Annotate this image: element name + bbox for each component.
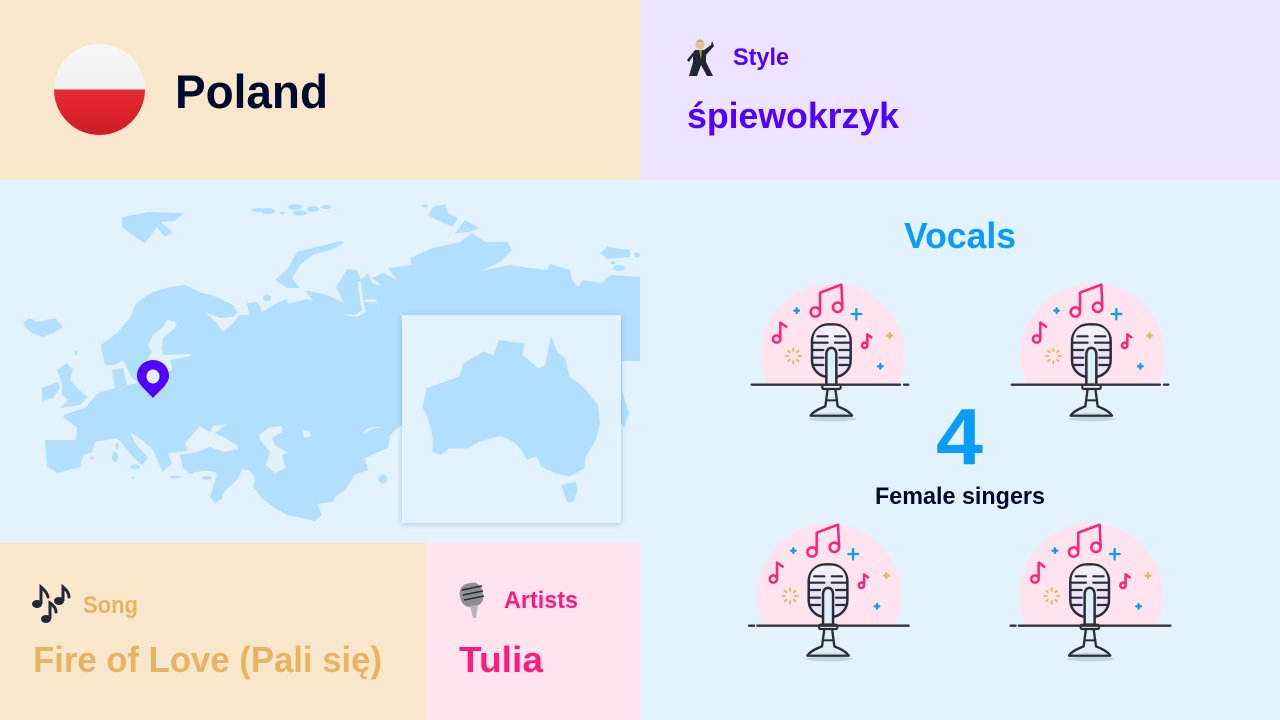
label: Female singers: Female singers: [875, 483, 1045, 510]
icon: microphone 1: [752, 283, 908, 427]
map: Eurasia: [23, 204, 640, 521]
panel: map: [0, 180, 640, 543]
number of singers: 4: [936, 392, 984, 481]
icon: microphone 3: [749, 523, 909, 667]
label: Style: Style: [733, 44, 789, 71]
panel: song: [0, 543, 427, 720]
icon: musical notes: [32, 587, 69, 623]
panel: country: [0, 0, 640, 180]
icon: microphone emoji: [458, 581, 485, 618]
panel: artists: [427, 543, 640, 720]
value: artist name: Tulia: [459, 639, 544, 680]
value: style name: śpiewokrzyk: [687, 95, 900, 136]
inset: Australia: [402, 315, 621, 523]
value: song title: Fire of Love (Pali się): [33, 639, 382, 680]
icon: microphone 2: [1012, 283, 1168, 427]
icon: microphone 4: [1011, 523, 1170, 667]
heading: Poland: Poland: [175, 65, 328, 118]
icon: map pin: [137, 360, 169, 398]
label: Artists: Artists: [504, 587, 578, 614]
icon: dancing man: [687, 40, 714, 76]
seas and lakes: [138, 281, 383, 473]
panel: style: [640, 0, 1280, 180]
panel: vocals: [640, 180, 1280, 720]
icon: Polish flag: [54, 44, 145, 135]
heading: Vocals: Vocals: [904, 215, 1016, 256]
label: Song: Song: [83, 592, 138, 619]
